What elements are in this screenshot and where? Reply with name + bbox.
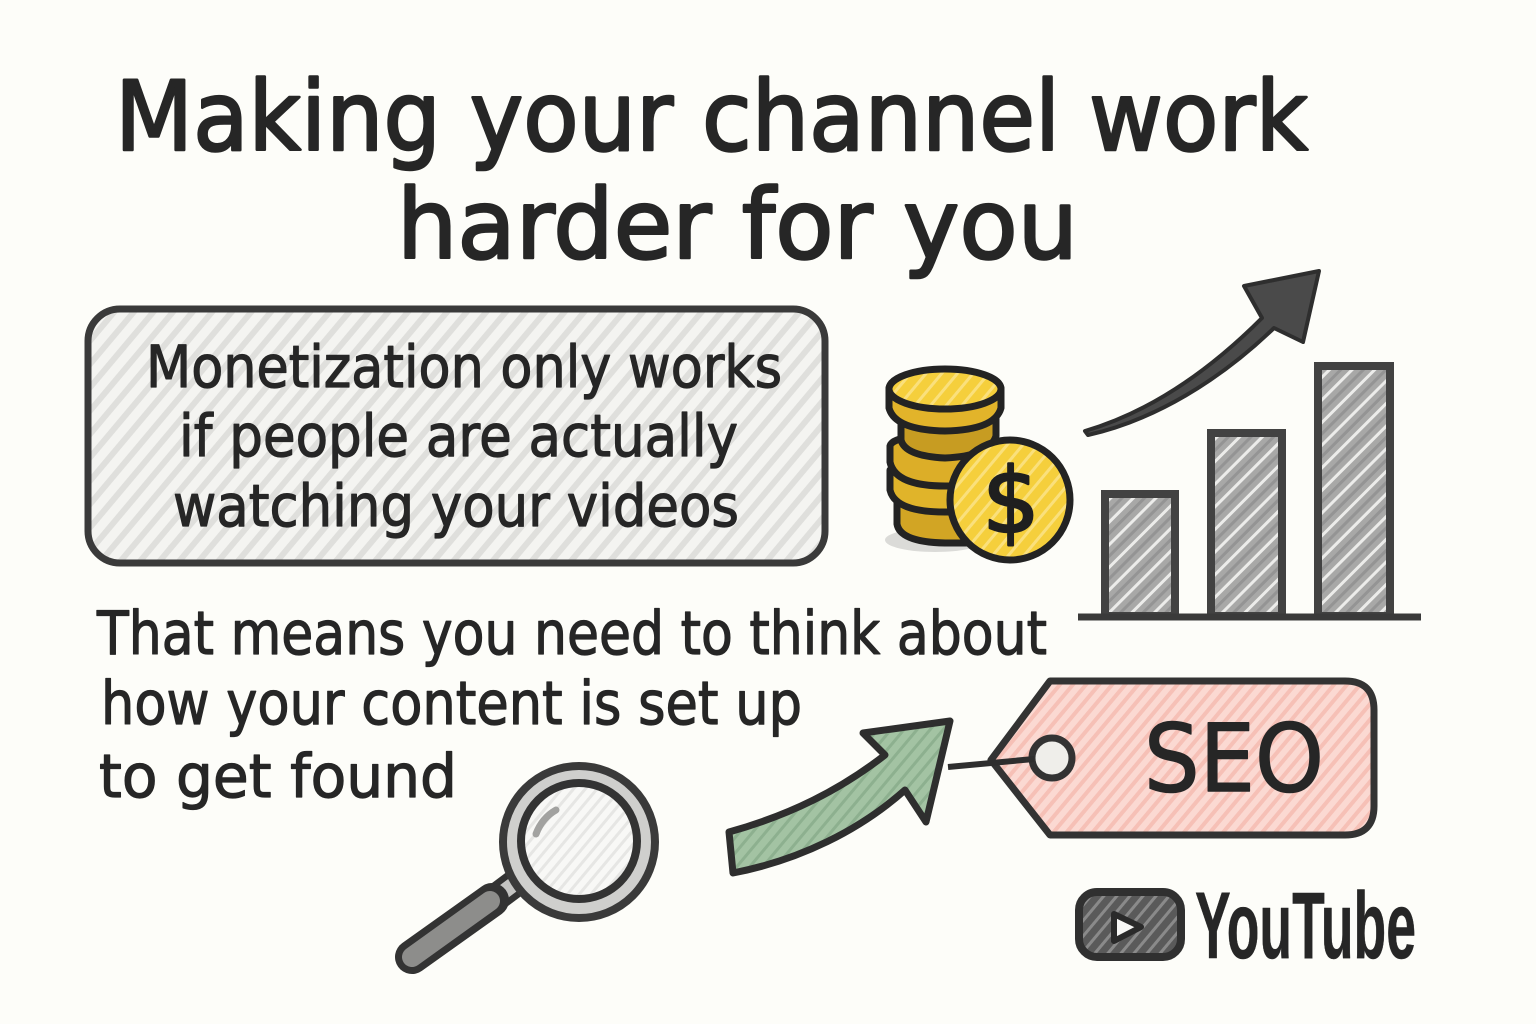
title xyxy=(115,61,1308,281)
arrow: green arrow to SEO tag xyxy=(729,721,950,873)
icon: SEO tag xyxy=(948,681,1374,835)
icon: coin stack with dollar coin xyxy=(885,369,1070,560)
bar 1 xyxy=(1105,494,1175,616)
logo: YouTube xyxy=(1079,873,1416,979)
callout text: Monetization only works xyxy=(146,333,782,401)
icon: magnifying glass xyxy=(412,766,655,957)
icon: dollar coin xyxy=(950,440,1070,560)
title: Making your channel work xyxy=(115,61,1308,173)
callout text xyxy=(146,333,782,540)
arrow: growth trend xyxy=(1085,271,1319,435)
axis line xyxy=(1078,614,1421,620)
text: explanation: to get found xyxy=(99,742,457,812)
tag label: SEO xyxy=(1144,705,1324,814)
bar chart xyxy=(1078,366,1421,617)
text: explanation: how your content is set up xyxy=(101,669,802,739)
bar 2 xyxy=(1211,433,1282,616)
icon: dollar coin: $ xyxy=(982,449,1040,554)
text: explanation xyxy=(96,599,1047,812)
callout text: watching your videos xyxy=(173,472,739,540)
callout text: if people are actually xyxy=(179,402,738,470)
icon: play button xyxy=(1079,892,1181,957)
bar 3 xyxy=(1318,366,1390,616)
panel: monetization callout xyxy=(88,309,825,563)
title: harder for you xyxy=(397,169,1078,281)
text: explanation: That means you need to think about xyxy=(96,599,1047,669)
